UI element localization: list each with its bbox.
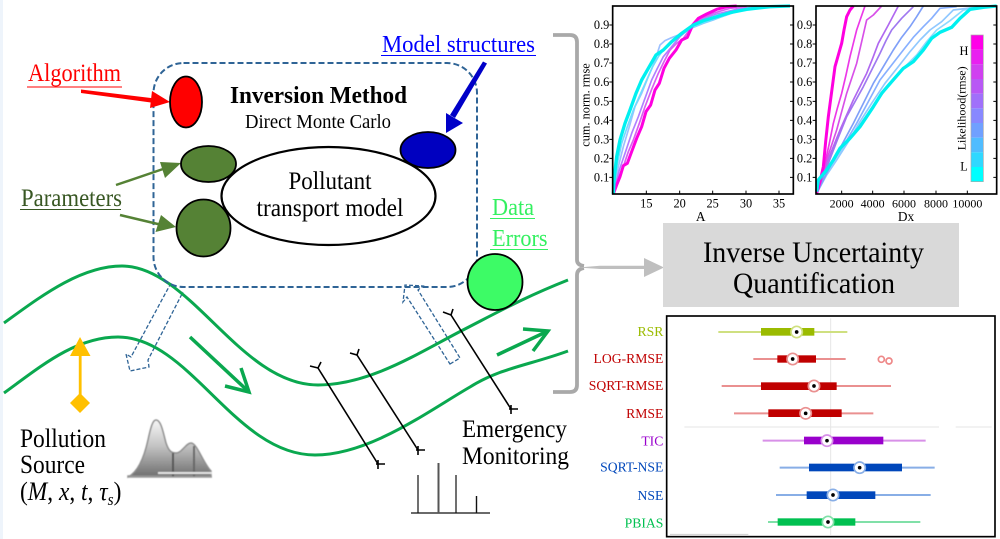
- ellipse: model structures: [400, 132, 456, 168]
- river channel: [4, 266, 568, 455]
- row: NSE: [776, 489, 931, 501]
- monitoring section 1: [310, 362, 385, 469]
- x tick labels: 20: [674, 196, 686, 210]
- x tick labels Dx: 8000: [924, 196, 948, 210]
- ellipse: pollutant transport model: [222, 147, 436, 245]
- label: data errors: [490, 194, 548, 252]
- chart: source distribution: [128, 420, 212, 477]
- x tick labels Dx: 10000: [952, 196, 982, 210]
- row: TIC: [763, 435, 926, 446]
- legend: likelihood colour bar: [954, 35, 983, 182]
- reference lines: [670, 318, 992, 535]
- labels: LOG-RMSE: [594, 351, 663, 366]
- text: pollutant transport model: transport model: [256, 193, 404, 222]
- y tick labels Dx: 0.4: [797, 113, 812, 127]
- monitoring section 2: [350, 349, 425, 455]
- dashed arrow: monitoring to method: [403, 285, 460, 364]
- panel: inverse uncertainty quantification: Inverse Uncertainty: [703, 237, 924, 269]
- y tick labels: 0.4: [594, 113, 609, 127]
- text: pollution source: s: [108, 491, 114, 509]
- ellipse: parameter upper: [181, 146, 236, 182]
- y tick labels: 0.7: [594, 56, 609, 70]
- labels: NSE: [638, 488, 663, 503]
- row: LOG-RMSE: [753, 353, 892, 365]
- monitoring section 3: [443, 309, 518, 414]
- labels: RMSE: [626, 406, 663, 421]
- labels: SQRT-RMSE: [589, 378, 663, 393]
- chart: cumulative curves for A: [578, 6, 793, 224]
- chart: objective function box plots: [589, 316, 995, 537]
- y tick labels: 0.1: [594, 170, 609, 184]
- arrow: model structures: [446, 62, 487, 133]
- y tick labels: 0.5: [594, 94, 609, 108]
- title: inversion method: Inversion Method: [230, 83, 408, 109]
- text: pollution source: Pollution: [20, 424, 106, 453]
- text: pollutant transport model: [256, 166, 404, 222]
- row: SQRT-NSE: [780, 462, 935, 473]
- arrow: to uncertainty quantification: [578, 258, 664, 277]
- x tick labels: [640, 196, 785, 224]
- axes A: [609, 6, 793, 194]
- x tick labels Dx: 2000: [830, 196, 854, 210]
- legend: likelihood colour bar: Likelihood(rmse): [954, 66, 968, 150]
- labels: TIC: [641, 433, 663, 448]
- bracket: [553, 35, 584, 392]
- y tick labels Dx: 0.8: [797, 37, 812, 51]
- x tick labels: 15: [640, 196, 652, 210]
- y axis label: cum. norm. rmse: [578, 63, 592, 147]
- curves Dx: [817, 6, 997, 193]
- y tick labels: 0.3: [594, 132, 609, 146]
- chart: monitoring samples: [411, 463, 490, 513]
- subtitle: direct monte carlo: Direct Monte Carlo: [245, 112, 391, 133]
- axes Dx: [813, 6, 997, 194]
- y tick labels Dx: 0.2: [797, 151, 812, 165]
- x tick labels Dx: 4000: [861, 196, 885, 210]
- y tick labels Dx: [797, 18, 812, 184]
- x tick labels Dx: 6000: [892, 196, 916, 210]
- x tick labels Dx: [830, 196, 982, 224]
- arrow: parameters to lower ellipse: [120, 215, 176, 232]
- text: emergency monitoring: [462, 414, 569, 470]
- panel: inverse uncertainty quantification: [663, 223, 959, 307]
- y tick labels: 0.9: [594, 18, 609, 32]
- x tick labels: A: [696, 209, 706, 224]
- arrow: algorithm: [81, 90, 170, 108]
- text: emergency monitoring: Emergency: [462, 414, 567, 443]
- frame: [667, 316, 995, 537]
- x tick labels Dx: Dx: [898, 209, 914, 224]
- row: RSR: [718, 326, 847, 338]
- x tick labels: 25: [707, 196, 719, 210]
- y tick labels: 0.8: [594, 37, 609, 51]
- text: emergency monitoring: Monitoring: [462, 441, 569, 470]
- y tick labels: 0.6: [594, 75, 609, 89]
- y tick labels Dx: 0.1: [797, 170, 812, 184]
- text: pollution source: Source: [20, 450, 85, 479]
- icon: pollution source marker: [70, 337, 90, 413]
- x tick labels: 30: [740, 196, 752, 210]
- label: algorithm: Algorithm: [28, 60, 121, 87]
- dashed arrow: source to method: [126, 283, 183, 371]
- ellipse: parameter lower: [176, 200, 230, 256]
- legend: likelihood colour bar: L: [960, 160, 968, 174]
- flow arrow: downstream: [190, 337, 249, 392]
- labels: RSR: [638, 324, 664, 339]
- text: pollution source: ): [114, 478, 121, 506]
- y tick labels: 0.2: [594, 151, 609, 165]
- row: PBIAS: [768, 516, 920, 528]
- curves A: [613, 6, 790, 194]
- y tick labels Dx: 0.7: [797, 56, 812, 70]
- arrow: parameters to upper ellipse: [116, 162, 181, 185]
- circle: data errors: [468, 254, 522, 310]
- labels: PBIAS: [625, 516, 663, 531]
- row: SQRT-RMSE: [722, 380, 891, 392]
- labels: SQRT-NSE: [600, 460, 663, 475]
- row: RMSE: [734, 408, 873, 419]
- x tick labels: 35: [773, 196, 785, 210]
- y tick labels Dx: 0.9: [797, 18, 812, 32]
- label: model structures: Model structures: [382, 31, 535, 58]
- chart: cumulative curves for Dx: [797, 6, 997, 224]
- label: data errors: Data: [492, 194, 534, 221]
- text: pollutant transport model: Pollutant: [288, 166, 372, 195]
- text: pollution source: (M, x, t, τ: [20, 478, 108, 506]
- inversion method box: [154, 63, 477, 287]
- y tick labels Dx: 0.6: [797, 75, 812, 89]
- labels: [589, 324, 664, 531]
- text: pollution source: [20, 424, 121, 509]
- flow arrow: outlet: [497, 329, 548, 355]
- panel: inverse uncertainty quantification: Quantification: [733, 268, 895, 300]
- y tick labels Dx: 0.3: [797, 132, 812, 146]
- label: data errors: Errors: [492, 225, 548, 252]
- y tick labels Dx: 0.5: [797, 94, 812, 108]
- ellipse: algorithm: [170, 76, 202, 128]
- y tick labels: [594, 18, 609, 184]
- label: parameters: Parameters: [21, 185, 122, 212]
- legend: likelihood colour bar: H: [960, 44, 969, 58]
